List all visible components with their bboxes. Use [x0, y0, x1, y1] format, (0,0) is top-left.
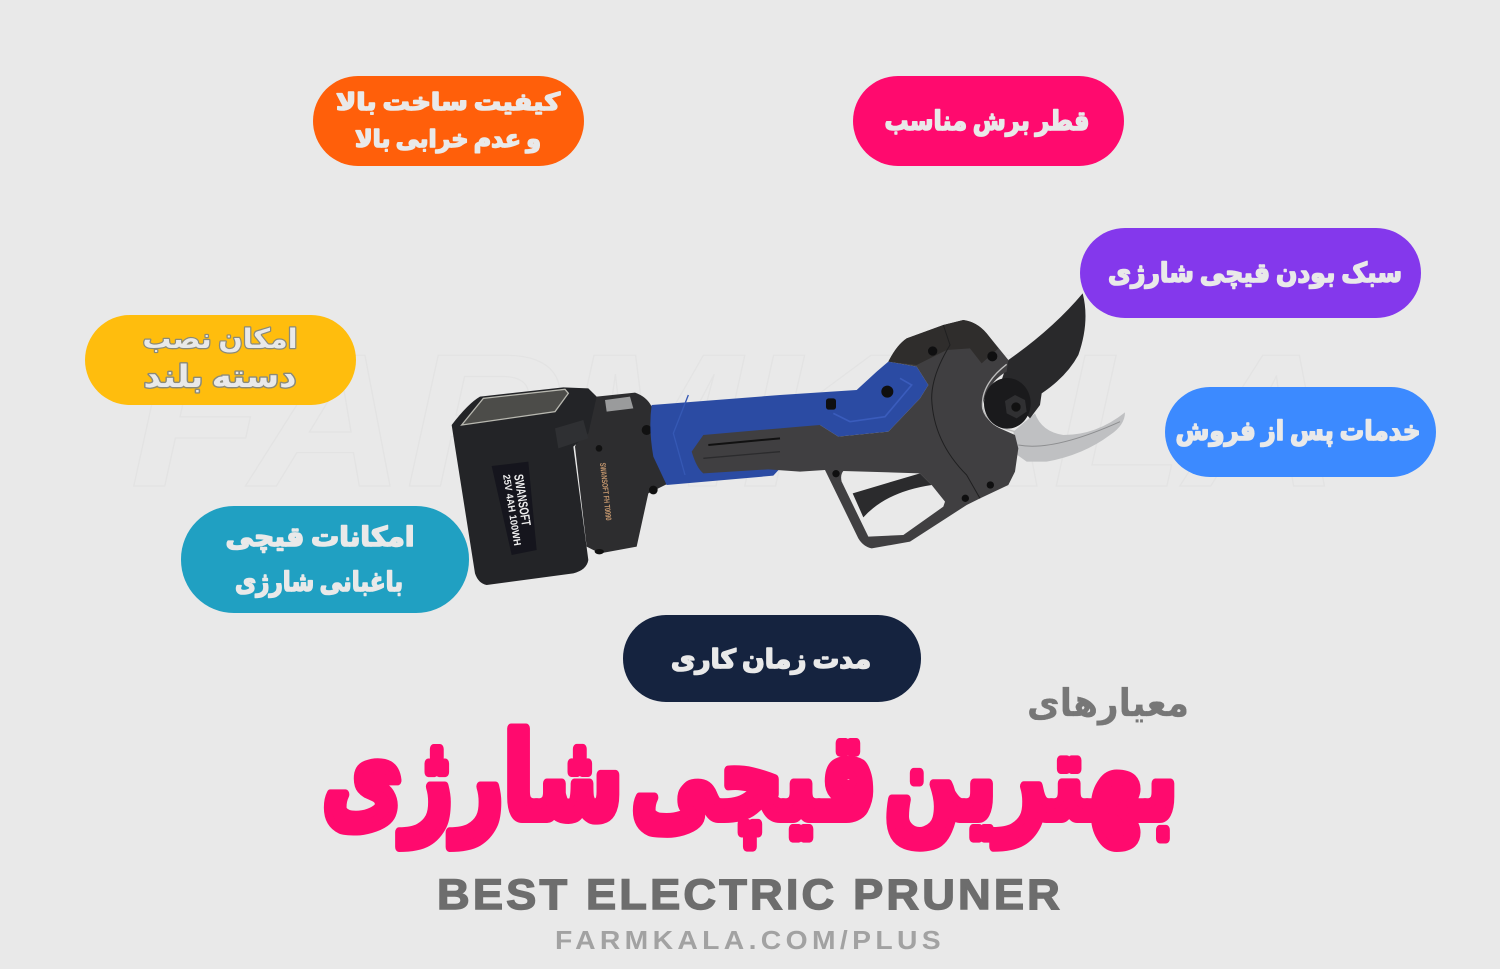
pill: light weight: [1080, 228, 1421, 318]
pill: after-sales service: [1165, 387, 1436, 477]
pill: garden shear features: امکانات قیچی: [226, 522, 414, 553]
blue handle: [650, 362, 928, 485]
pill: cutting diameter: قطر برش مناسب: [884, 106, 1090, 137]
grey body: [692, 320, 1018, 548]
trigger guard opening: [841, 471, 945, 537]
pill: light weight: سبک بودن قیچی شارژی: [1108, 258, 1402, 289]
pill: garden shear features: [181, 506, 469, 613]
seam line: [932, 325, 980, 498]
watermark: FARMKALA: FARMKALA: [130, 315, 1340, 527]
head cap: [888, 320, 998, 365]
pill: after-sales service: خدمات پس از فروش: [1176, 416, 1420, 447]
pill: build quality: کیفیت ساخت بالا: [336, 88, 560, 116]
grip slit: [708, 438, 780, 445]
screws: [826, 346, 997, 502]
pill: working time: مدت زمان کاری: [671, 645, 871, 675]
product photo: electric pruner: 25V 4AH 100WH: [500, 474, 522, 547]
subtitle: criteria: معیارهای: [1027, 681, 1189, 725]
pill: long handle option: [85, 315, 356, 405]
battery and adapter: [452, 387, 668, 585]
website url: FARMKALA.COM/PLUS: [555, 925, 945, 955]
product photo: electric pruner: [452, 293, 1125, 585]
trigger: [853, 473, 932, 517]
upper blade: [1000, 293, 1085, 418]
pill: build quality: [313, 76, 584, 166]
handle and head: [650, 293, 1125, 548]
battery label text: SWANSOFT: [511, 473, 534, 527]
main title: بهترین قیچی شارژی: [322, 708, 1178, 847]
pill: long handle option: امکان نصب: [142, 324, 298, 355]
pill: cutting diameter: [853, 76, 1124, 166]
lower blade: [1013, 412, 1125, 462]
pill: garden shear features: باغبانی شارژی: [235, 567, 403, 598]
english title: BEST ELECTRIC PRUNER: [437, 871, 1063, 919]
pill: working time: [623, 615, 921, 702]
pill: long handle option: دسته بلند: [144, 359, 296, 395]
pivot bolt: [982, 364, 1015, 432]
pill: build quality: و عدم خرابی بالا: [355, 125, 541, 153]
adapter label text: SWANSOFT FH T0090: [598, 462, 613, 521]
